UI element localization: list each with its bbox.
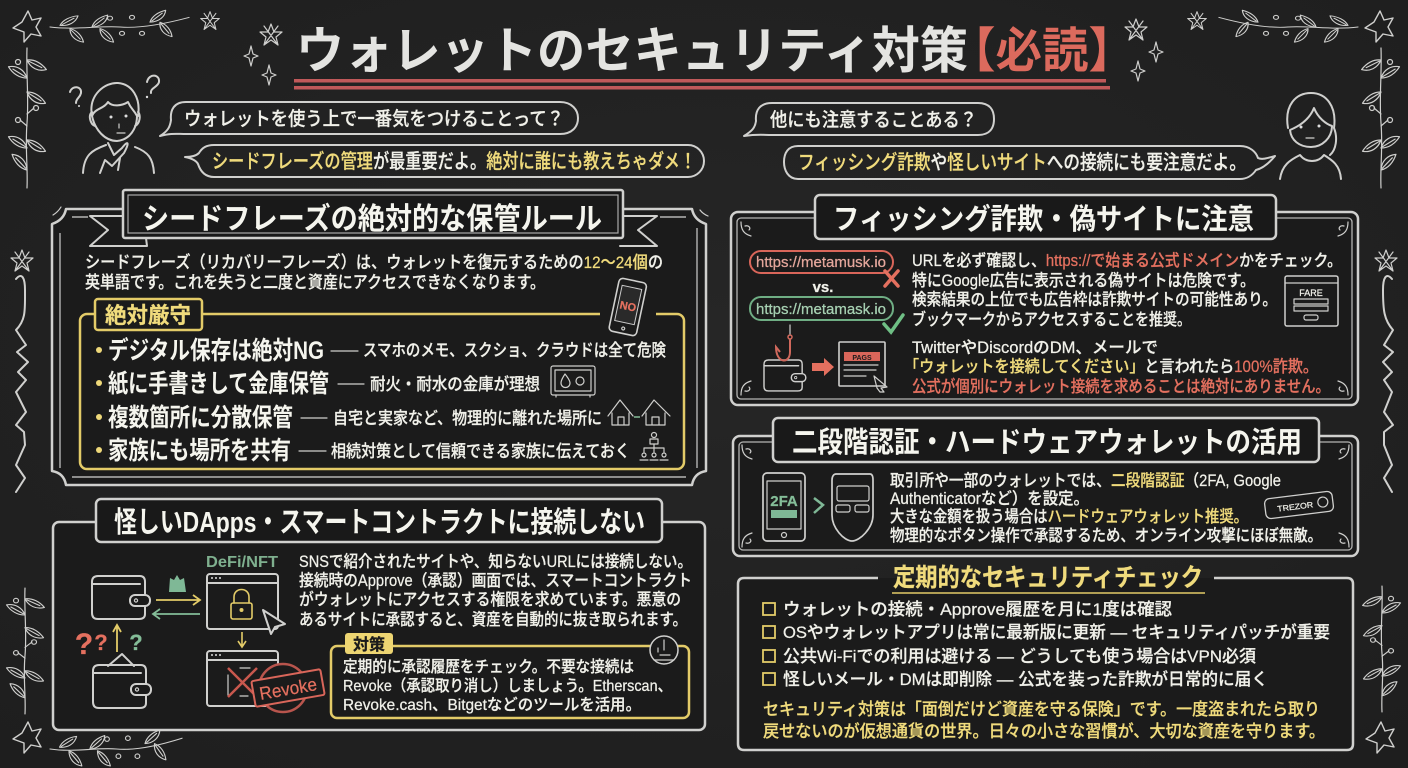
heading ribbon tails (90, 216, 657, 246)
title (244, 19, 1163, 90)
speech bubble: answer 1 (185, 145, 704, 177)
panel: seed phrase storage rules (52, 190, 708, 485)
speech bubble: question 1: ウォレットを使う上で一番気をつけることって？ (184, 108, 564, 130)
rules label: 絶対厳守 (105, 303, 191, 328)
rule 4: 家族にも場所を共有 (108, 437, 291, 465)
arrows between wallet and site (153, 595, 200, 619)
heading banner: 二段階認証・ハードウェアウォレットの活用 (792, 426, 1302, 459)
icon: phone 2FA: 2FA (770, 493, 798, 510)
rule 2: 紙に手書きして金庫保管 (108, 370, 329, 398)
fake URL (750, 251, 893, 273)
heading banner: フィッシング詐欺・偽サイトに注意 (833, 203, 1254, 236)
cross mark (885, 271, 898, 286)
rule 1 (96, 336, 666, 365)
icon: clock (650, 636, 678, 664)
icon: safe (551, 366, 595, 397)
icon: two houses (608, 400, 670, 425)
URL check text (912, 251, 1342, 329)
DM warning text: TwitterやDiscordのDM、メールで (912, 338, 1158, 357)
real URL: https://metamask.io (756, 302, 886, 318)
panel frame (738, 578, 1353, 750)
browser with lock (207, 574, 278, 629)
DeFi label: DeFi/NFT (206, 554, 278, 571)
icon: fake form (1285, 276, 1338, 326)
icon: hardware wallet (832, 474, 873, 541)
chevron (814, 498, 823, 513)
rule 3: 自宅と実家など、物理的に離れた場所に (333, 409, 602, 428)
rule 4 (96, 432, 668, 465)
description text (299, 552, 692, 629)
DM warning text: 「ウォレットを接続してください」と言われたら100%詐欺。 (904, 357, 1318, 376)
title stars left (244, 24, 282, 85)
decoration: bottom-right ornaments (1363, 586, 1400, 753)
2FA text (890, 471, 1322, 545)
checklist item 1: ウォレットの接続・Approve履歴を月に1度は確認 (783, 600, 1172, 619)
revoke stamp: Revoke (258, 674, 318, 704)
speech bubble: answer 2: フィッシング詐欺や怪しいサイトへの接続にも要注意だよ。 (798, 151, 1246, 174)
rule 2 (96, 366, 595, 398)
speech bubble: question 1 (160, 102, 578, 136)
heading banner (123, 190, 623, 238)
connection icon (169, 575, 186, 592)
checklist item 4: 怪しいメール・DMは即削除 — 公式を装った詐欺が日常的に届く (783, 669, 1268, 689)
title stars right (1125, 19, 1163, 81)
heading banner: 怪しいDApps・スマートコントラクトに接続しない (114, 506, 645, 539)
description text: がウォレットにアクセスする権限を求めています。悪意の (299, 589, 681, 609)
rules box (80, 271, 684, 469)
description text: SNSで紹介されたサイトや、知らないURLには接続しない。 (299, 552, 692, 571)
countermeasure box (331, 633, 689, 718)
character: woman (1280, 93, 1341, 179)
panel frame (733, 436, 1358, 556)
intro text: 英単語です。これを失うと二度と資産にアクセスできなくなります。 (85, 273, 545, 292)
question marks: ? (129, 630, 143, 655)
check mark (884, 315, 903, 332)
revoke stamp (251, 664, 325, 712)
DM warning text (904, 338, 1330, 396)
real URL (750, 297, 893, 320)
countermeasure text (343, 658, 672, 714)
wallet top (92, 576, 150, 619)
speech bubble: question 2: 他にも注意することある？ (770, 109, 977, 131)
heading banner: シードフレーズの絶対的な保管ルール (142, 202, 602, 236)
icon: Trezor key: TREZOR (1277, 500, 1314, 514)
checklist item 3: 公共Wi-Fiでの利用は避ける — どうしても使う場合はVPN必須 (783, 647, 1256, 666)
diagram: wallet connection flow (75, 554, 325, 712)
countermeasure text: Revoke（承認取り消し）しましょう。Etherscan、 (343, 677, 672, 695)
speech bubble: question 2 (744, 103, 994, 136)
up arrow (113, 625, 121, 652)
rule 2: 耐火・耐水の金庫が理想 (370, 374, 540, 394)
icon: Trezor key (1264, 491, 1334, 519)
title: ウォレットのセキュリティ対策 (296, 23, 968, 79)
title: 【必読】 (949, 25, 1135, 78)
decoration: top-left corner ornaments (9, 10, 219, 188)
question marks: ? (94, 630, 108, 655)
title underline (294, 79, 1110, 90)
countermeasure label (345, 633, 393, 654)
closing message: 戻せないのが仮想通貨の世界。日々の小さな習慣が、大切な資産を守ります。 (763, 721, 1325, 741)
URL check text: URLを必ず確認し、https://で始まる公式ドメインかをチェック。 (912, 251, 1342, 270)
panel: two-factor and hardware wallet (733, 418, 1358, 556)
intro text: シードフレーズ（リカバリーフレーズ）は、ウォレットを復元するための12〜24個の (85, 252, 663, 272)
intro text (85, 252, 663, 292)
URL check text: ブックマークからアクセスすることを推奨。 (912, 309, 1191, 329)
rule 3: 複数箇所に分散保管 (108, 404, 293, 432)
countermeasure text: Revoke.cash、Bitgetなどのツールを活用。 (343, 696, 641, 714)
question marks: ? (75, 628, 93, 661)
fake URL: https://metamusk.io (756, 255, 886, 271)
rule 1: スマホのメモ、スクショ、クラウドは全て危険 (363, 341, 666, 360)
2FA text: Authenticatorなど）を設定。 (890, 489, 1089, 508)
countermeasure text: 定期的に承認履歴をチェック。不要な接続は (343, 658, 634, 676)
panel: suspicious DApps (53, 499, 705, 730)
heading banner (773, 418, 1319, 462)
decoration: left middle vine (11, 250, 33, 492)
2FA text: 物理的なボタン操作で承認するため、オンライン攻撃にほぼ無敵。 (890, 526, 1322, 545)
panel frame (52, 207, 708, 485)
heading: 定期的なセキュリティチェック (893, 564, 1203, 592)
rules label (95, 299, 202, 330)
heading banner (815, 195, 1276, 239)
speech bubble: answer 2 (784, 146, 1275, 179)
rule 4: 相続対策として信頼できる家族に伝えておく (331, 442, 630, 461)
icon: phone NO (590, 271, 666, 343)
icon: fake form: FARE (1299, 288, 1323, 298)
2FA text: 大きな金額を扱う場合はハードウェアウォレット推奨。 (890, 507, 1248, 526)
icon: family tree (640, 432, 668, 460)
browser with cross (207, 651, 278, 706)
wallet bottom (93, 654, 151, 708)
icon: phone NO: NO (618, 299, 638, 315)
URL check text: 特にGoogle広告に表示される偽サイトは危険です。 (912, 271, 1255, 290)
DM warning text: 公式が個別にウォレット接続を求めることは絶対にありません。 (912, 376, 1330, 396)
decoration: right middle vine (1375, 250, 1397, 492)
cursor (263, 610, 285, 634)
panel: regular security check (738, 564, 1353, 750)
decoration: bottom-left ornaments (7, 588, 182, 767)
description text: 接続時のApprove（承認）画面では、スマートコントラクト (299, 571, 692, 590)
rule 1: デジタル保存は絶対NG (108, 336, 324, 365)
closing message: セキュリティ対策は「面倒だけど資産を守る保険」です。一度盗まれたら取り (763, 700, 1320, 719)
speech bubble: answer 1: シードフレーズの管理が最重要だよ。絶対に誰にも教えちゃダメ！ (212, 150, 696, 173)
icon: phone 2FA (763, 473, 805, 541)
heading banner (96, 499, 662, 542)
rule 3 (96, 400, 670, 432)
down arrow (238, 632, 246, 647)
character: thinking man (70, 76, 159, 173)
panel: phishing (731, 195, 1358, 405)
2FA text: 取引所や一部のウォレットでは、二段階認証（2FA, Google (890, 471, 1281, 490)
checklist item 2: OSやウォレットアプリは常に最新版に更新 — セキュリティパッチが重要 (783, 622, 1330, 642)
panel frame (731, 212, 1358, 405)
description text: あるサイトに承認すると、資産を自動的に抜き取られます。 (299, 610, 687, 629)
vs: vs. (813, 279, 833, 296)
icon: phishing hook and page: PAGS (852, 355, 872, 362)
URL check text: 検索結果の上位でも広告枠は詐欺サイトの可能性あり。 (912, 290, 1277, 309)
icon: phishing hook and page (764, 325, 887, 392)
URL comparison (750, 251, 903, 332)
countermeasure label: 対策 (353, 635, 385, 654)
decoration: top-right corner ornaments (1188, 10, 1399, 188)
question marks (75, 628, 143, 661)
closing message (763, 700, 1325, 741)
